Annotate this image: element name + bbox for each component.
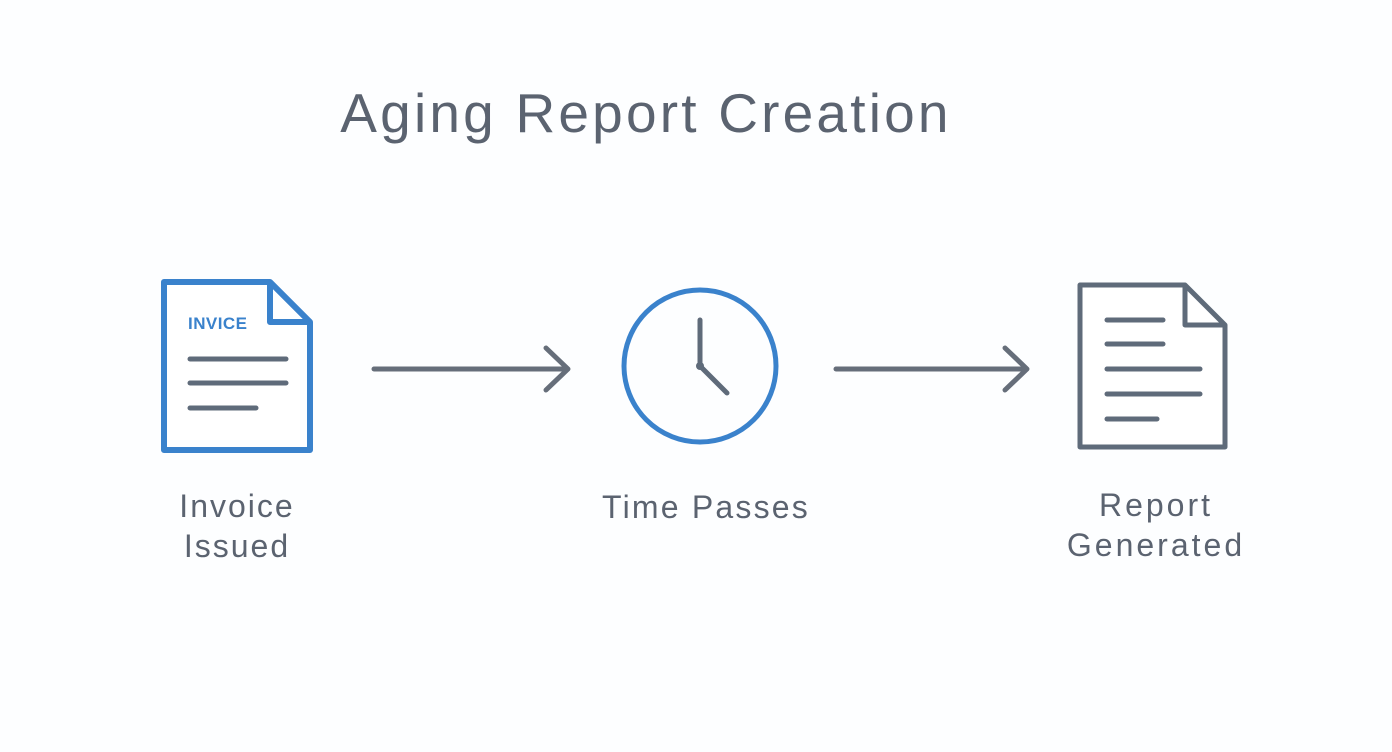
- icon: invoice document: INVICE: [188, 314, 247, 333]
- label: invoice issued: Issued: [184, 528, 290, 564]
- icon: invoice document: [164, 282, 310, 450]
- icon: report document: [1080, 285, 1225, 447]
- title: Aging Report Creation: [340, 82, 952, 144]
- label: report generated: Generated: [1067, 527, 1245, 563]
- label: report generated: Report: [1099, 487, 1213, 523]
- label: report generated: [1067, 487, 1245, 563]
- label: invoice issued: [179, 488, 295, 564]
- arrow 1: [374, 348, 568, 390]
- icon: clock: [624, 290, 776, 442]
- label: invoice issued: Invoice: [179, 488, 295, 524]
- arrow 2: [836, 348, 1027, 390]
- label: time passes: Time Passes: [602, 489, 810, 525]
